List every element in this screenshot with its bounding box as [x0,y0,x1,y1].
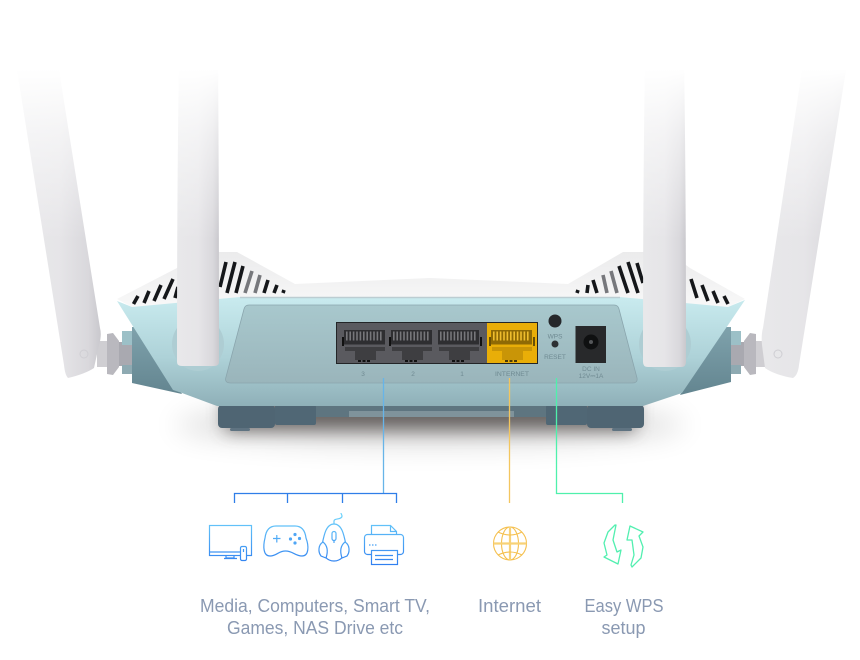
four antennas [17,60,846,378]
rear recessed panel [226,305,637,383]
caption: WPS: Easy WPS [584,596,664,616]
caption: devices [200,596,430,638]
port captions: 12V⎓1A [579,373,604,380]
rear feet and underside [218,405,644,431]
caption: devices: Games, NAS Drive etc [227,618,403,638]
port captions: 3 [361,371,365,378]
router side flanks [132,327,731,395]
port captions: WPS [548,334,563,340]
reset pinhole [552,340,558,348]
caption: internet: Internet [478,596,541,616]
icon: mouse [319,513,349,561]
port captions: INTERNET [495,371,529,378]
antenna inner right [643,60,686,367]
router illustration [0,50,860,431]
icon: WPS arrows [604,525,643,567]
port captions: DC IN [582,366,600,373]
antenna top fade [0,50,860,240]
antenna inner left [177,60,219,366]
LAN port 1 [438,330,482,361]
port captions: 1 [460,371,464,378]
power jack [576,326,606,363]
floor shadow [175,398,685,445]
left antenna hinge [97,331,132,375]
icon: game controller [264,526,308,556]
LAN port 2 [389,330,432,361]
internet port [489,330,535,361]
vent slots [134,262,728,304]
WPS button [548,314,562,328]
caption: WPS: setup [602,618,646,638]
connector: internet [508,378,510,503]
icon: globe [494,527,526,560]
router top shell with vents [117,252,745,307]
caption: devices: Media, Computers, Smart TV, [200,596,430,616]
LAN port 3 [342,330,385,361]
port captions: 2 [411,371,415,378]
antenna collars [172,317,691,371]
router blue body [117,297,745,406]
connector: WPS [556,378,622,503]
icon: printer [364,526,404,564]
caption: WPS [584,596,664,638]
port captions [361,334,604,380]
antenna outer right [762,70,846,378]
connector: LAN to devices [234,378,396,503]
port captions: RESET [544,354,566,361]
icon: TV [210,526,252,560]
antenna outer left [17,70,101,378]
right antenna hinge [731,331,766,375]
LAN and internet port block [336,322,538,364]
